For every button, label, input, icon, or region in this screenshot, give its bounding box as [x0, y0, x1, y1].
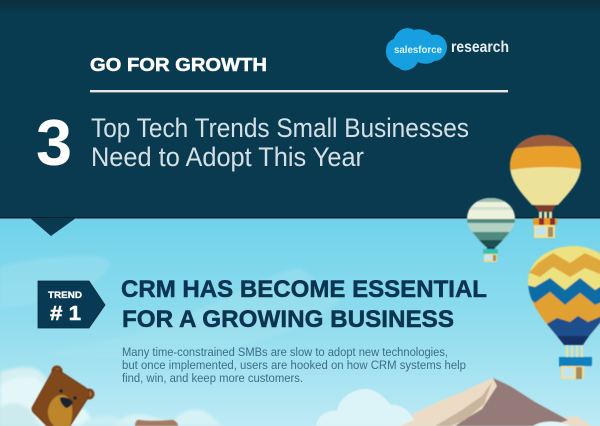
bear: second, partly visible	[135, 420, 178, 426]
balloon: large zigzag	[524, 242, 600, 379]
section heading: CRM HAS BECOME ESSENTIAL	[121, 276, 487, 303]
header rule	[90, 90, 508, 92]
salesforce research logo: salesforce	[394, 44, 442, 56]
body paragraph: but once implemented, users are hooked on how CRM systems help	[122, 358, 466, 372]
body paragraph	[122, 345, 466, 385]
large number 3: 3	[36, 106, 72, 179]
sky background	[0, 216, 600, 426]
balloon: large orange	[509, 134, 582, 239]
cloud by mountain	[316, 389, 414, 426]
salesforce research logo: research	[451, 39, 509, 56]
title: Need to Adopt This Year	[91, 142, 364, 172]
bear: left	[32, 366, 94, 426]
body paragraph: Many time-constrained SMBs are slow to adopt new technologies,	[122, 345, 448, 359]
salesforce research logo	[386, 28, 509, 70]
body paragraph: find, win, and keep more customers.	[122, 371, 303, 385]
trend 1 tag: TREND	[48, 290, 82, 301]
title	[91, 113, 469, 172]
section heading: FOR A GROWING BUSINESS	[122, 306, 454, 333]
mountain	[395, 378, 592, 426]
title: Top Tech Trends Small Businesses	[91, 113, 469, 143]
icon: salesforce cloud	[386, 28, 447, 70]
clouds left	[0, 367, 570, 426]
trend 1 tag	[38, 281, 105, 328]
trend 1 tag: # 1	[50, 303, 81, 325]
header pointer triangle	[30, 218, 76, 236]
section heading	[121, 276, 487, 333]
kicker: go for growth: GO FOR GROWTH	[90, 55, 267, 75]
header band	[0, 0, 600, 218]
balloon: small green	[466, 197, 516, 263]
